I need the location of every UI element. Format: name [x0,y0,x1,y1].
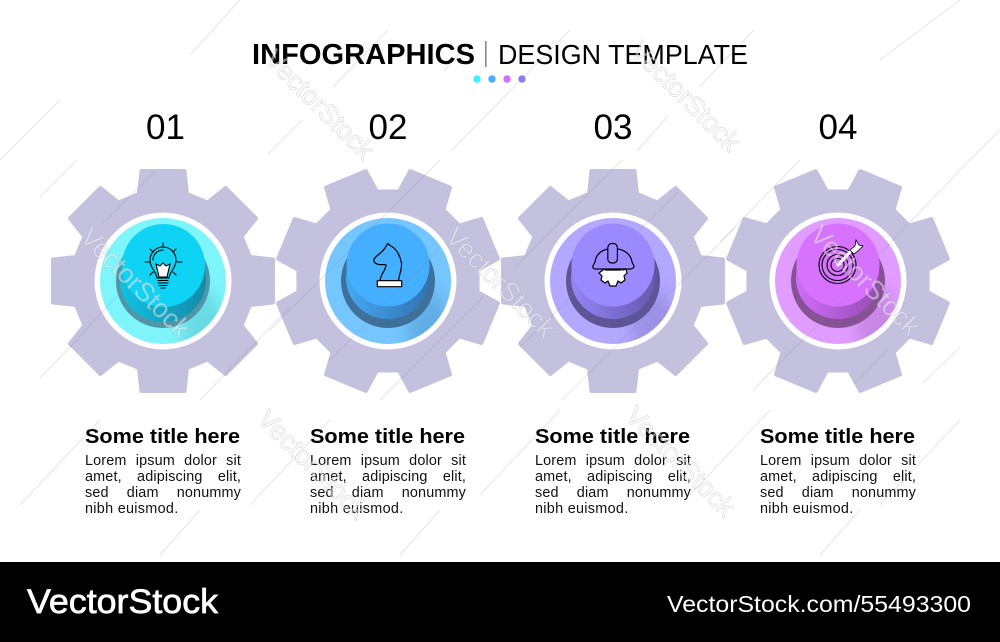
watermark overlay: VectorStock [252,404,374,526]
text block: column 1: amet, adipiscing elit, [85,468,241,484]
text block: column 2: nibh euismod. [310,500,404,516]
text block: column 3: Lorem ipsum dolor sit [535,452,691,468]
button 4 [770,212,906,350]
number 02: 02 [369,108,407,147]
button 1 [94,212,232,350]
text block: column 2: sed diam nonummy [310,484,466,500]
watermark overlay: VectorStock [805,220,927,342]
text block: column 2 [310,452,466,516]
text block: column 4: nibh euismod. [760,500,854,516]
text block: column 2: amet, adipiscing elit, [310,468,466,484]
text block: column 1: Lorem ipsum dolor sit [85,452,241,468]
icon: target with arrow [819,240,863,284]
number 01: 01 [146,108,185,147]
footer bar: VectorStock [27,583,219,621]
text block: column 3: nibh euismod. [535,500,628,516]
title: INFOGRAPHICS [252,39,475,71]
title: DESIGN TEMPLATE [498,39,748,70]
watermark overlay: VectorStock [620,401,742,523]
watermark overlay: VectorStock [625,36,747,158]
heading: column 4: Some title here [760,426,915,448]
text block: column 1: sed diam nonummy [85,484,241,500]
gear 1 [53,171,273,391]
heading: column 1: Some title here [85,426,240,448]
text block: column 4: Lorem ipsum dolor sit [760,452,916,468]
icon: helmet with gear [593,244,634,286]
gear 2 [244,137,532,425]
gear 3 [503,171,723,391]
watermark overlay: VectorStock [75,222,197,344]
heading: column 3: Some title here [535,426,690,448]
text block: column 4: sed diam nonummy [760,484,916,500]
text block: column 4 [760,452,916,516]
title dots [473,75,526,83]
title [252,39,748,71]
button 3 [544,212,682,350]
text block: column 1 [85,452,241,516]
text block: column 1: nibh euismod. [85,500,178,516]
text block: column 3 [535,452,691,516]
text block: column 3: sed diam nonummy [535,484,691,500]
text block: column 2: Lorem ipsum dolor sit [310,452,466,468]
watermark overlay: VectorStock [440,222,562,344]
icon: light bulb [145,243,182,288]
watermark overlay: VectorStock [259,44,381,166]
footer bar [0,562,1000,642]
footer bar: VectorStock.com/55493300 [667,591,971,617]
heading: column 2: Some title here [310,426,465,448]
gear 4 [694,137,982,425]
number 03: 03 [594,108,632,147]
text block: column 3: amet, adipiscing elit, [535,468,691,484]
text block: column 4: amet, adipiscing elit, [760,468,916,484]
button 2 [320,212,456,350]
icon: chess knight [374,244,402,287]
number 04: 04 [819,108,857,147]
